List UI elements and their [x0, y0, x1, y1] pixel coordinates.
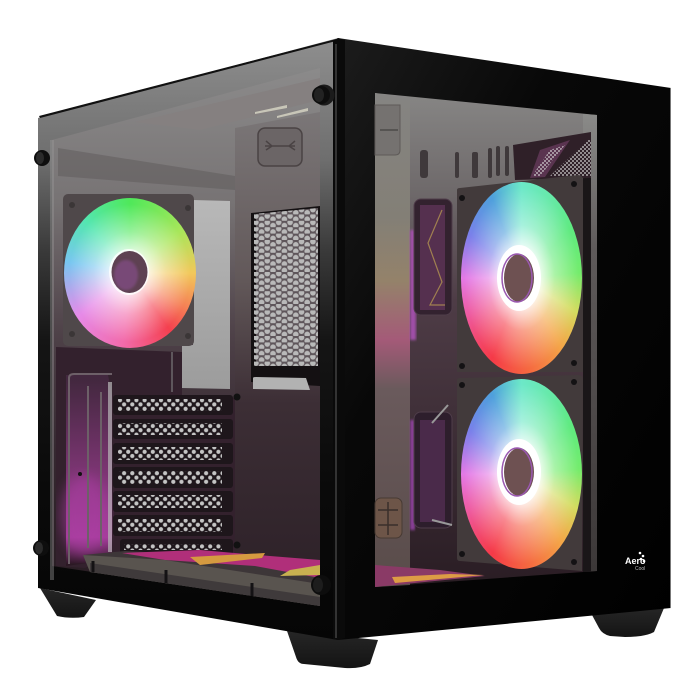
- frame screw holes: [69, 202, 191, 339]
- ceiling mesh: [135, 78, 320, 130]
- upper grommet: [414, 199, 452, 315]
- fan 1 rainbow: [461, 182, 582, 374]
- left fan rainbow: [64, 198, 196, 348]
- lower grommet: [414, 405, 452, 528]
- cable grommet top: [258, 128, 302, 166]
- left fan frame: [63, 194, 194, 346]
- left fan hub: [109, 249, 149, 295]
- pci slots: [113, 395, 233, 559]
- purple backplate: [56, 347, 235, 568]
- fan frame 1: [457, 175, 583, 372]
- fan 2 hub: [497, 439, 541, 505]
- bottom fans: [83, 550, 320, 606]
- hex mesh panel: [251, 206, 320, 390]
- logo: Aero: [625, 556, 646, 566]
- frame holes 1: [459, 181, 577, 369]
- fan 1 hub: [497, 245, 541, 311]
- fan 2 rainbow: [461, 379, 582, 569]
- left rail: [50, 140, 54, 580]
- top right mesh bracket: [513, 132, 591, 180]
- magenta glow panel: [66, 375, 112, 566]
- fan frame 2: [457, 375, 583, 571]
- white plate: [182, 200, 230, 389]
- logo: Cool: [635, 566, 645, 572]
- right face of case: [338, 38, 671, 640]
- small grommet upper left: [375, 105, 400, 155]
- ceiling highlights: [255, 105, 308, 118]
- top edge line: [39, 39, 336, 118]
- corner highlight: [335, 44, 337, 638]
- vent slots: [420, 146, 509, 178]
- slot below mesh: [253, 377, 310, 390]
- left interior: [33, 68, 334, 606]
- foot: right: [592, 608, 664, 637]
- knob: lower right: [311, 575, 331, 595]
- dark strip beside fans: [583, 178, 591, 572]
- bottom strip highlight: [392, 574, 484, 583]
- left column with rainbow glow: [375, 93, 410, 587]
- plate side line: [171, 352, 173, 392]
- knob: upper left: [34, 150, 50, 166]
- magenta glow: [61, 475, 109, 555]
- upper beam: [58, 148, 235, 190]
- purple glow strip: [410, 230, 416, 340]
- right column: [583, 114, 597, 572]
- right edge highlight: [670, 88, 671, 608]
- left glass panel: [38, 38, 338, 640]
- slot bracket strip: [108, 382, 112, 552]
- screws: [78, 394, 240, 548]
- frame holes 2: [459, 379, 577, 565]
- foot: left: [40, 588, 96, 618]
- lower purple glow strip: [410, 420, 415, 530]
- logo: [625, 552, 646, 572]
- corner post: [333, 38, 345, 640]
- back wall: [235, 112, 320, 605]
- knob: upper right: [312, 84, 334, 106]
- right window: [375, 93, 597, 587]
- knob: lower left: [33, 540, 49, 556]
- small grommet lower left: [375, 498, 402, 538]
- foot: center: [287, 631, 378, 668]
- expansion rails: [69, 374, 112, 564]
- bottom rainbow strip: [375, 565, 485, 587]
